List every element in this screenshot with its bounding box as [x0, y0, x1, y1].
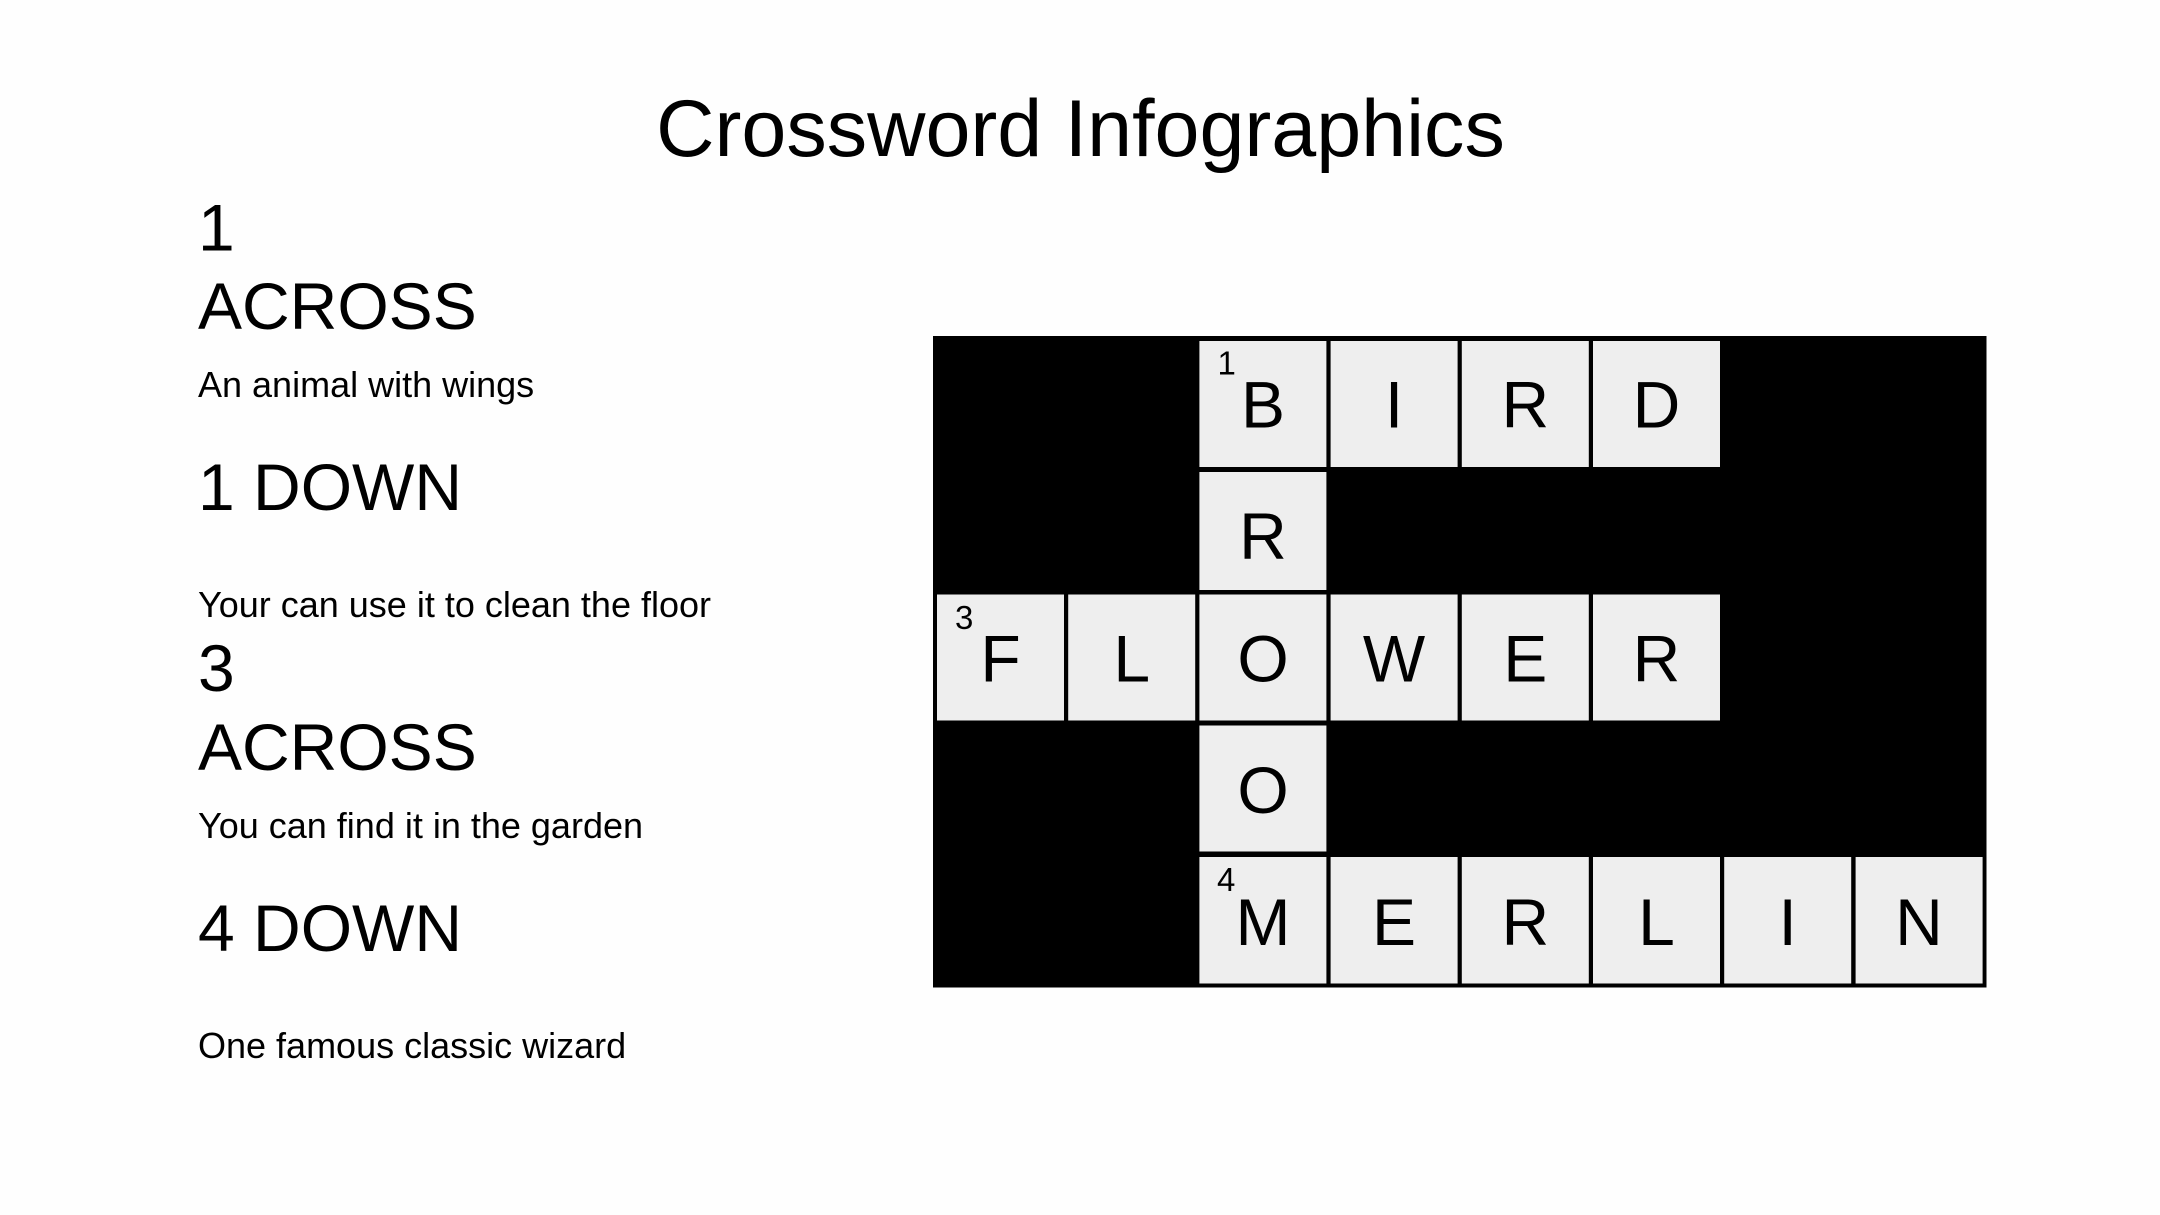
word: BIRD: R	[1501, 368, 1549, 442]
word: BROOM cells	[1199, 472, 1326, 852]
word: FLOWER: E	[1503, 622, 1547, 696]
clue: 1 across text: An animal with wings	[198, 364, 534, 405]
clue: 1 down heading: 1 DOWN	[198, 450, 462, 524]
cell numbers: 3	[955, 599, 973, 636]
panel: clues	[198, 190, 711, 1066]
word: MERLIN: E	[1372, 885, 1416, 959]
cell numbers: 4	[1217, 861, 1235, 898]
clue: 3 across heading: 3	[198, 631, 235, 705]
clue: 3 across heading	[198, 631, 477, 784]
word: BIRD	[1199, 341, 1720, 467]
word: BROOM cells: O	[1237, 753, 1289, 827]
word: BIRD: B	[1241, 368, 1285, 442]
clue: 1 across heading: ACROSS	[198, 269, 477, 343]
word: FLOWER: F	[980, 622, 1021, 696]
word: MERLIN: I	[1779, 885, 1797, 959]
word: FLOWER: R	[1633, 622, 1680, 696]
word: MERLIN: N	[1895, 885, 1943, 959]
word: BIRD: D	[1633, 368, 1680, 442]
title: Crossword Infographics	[656, 84, 1505, 174]
word: MERLIN: R	[1501, 885, 1549, 959]
clue: 4 down text: One famous classic wizard	[198, 1025, 626, 1066]
word: BROOM cells: R	[1239, 499, 1287, 573]
word: MERLIN	[1199, 857, 1983, 984]
clue: 1 across heading	[198, 190, 477, 343]
word: FLOWER: W	[1363, 622, 1426, 696]
word: FLOWER: O	[1237, 622, 1289, 696]
word: MERLIN: M	[1236, 885, 1290, 959]
word: BIRD: I	[1385, 368, 1403, 442]
clue: 3 across text: You can find it in the garden	[198, 805, 643, 846]
clue: 4 down heading: 4 DOWN	[198, 891, 462, 965]
panel: crossword grid	[933, 336, 1986, 988]
clue: 1 across heading: 1	[198, 190, 235, 264]
cell numbers	[955, 344, 1236, 898]
word: MERLIN: L	[1638, 885, 1675, 959]
word: FLOWER	[937, 594, 1720, 720]
clue: 1 down text: Your can use it to clean the floor	[198, 584, 711, 625]
cell numbers: 1	[1218, 344, 1236, 382]
clue: 3 across heading: ACROSS	[198, 710, 477, 784]
word: FLOWER: L	[1113, 622, 1150, 696]
